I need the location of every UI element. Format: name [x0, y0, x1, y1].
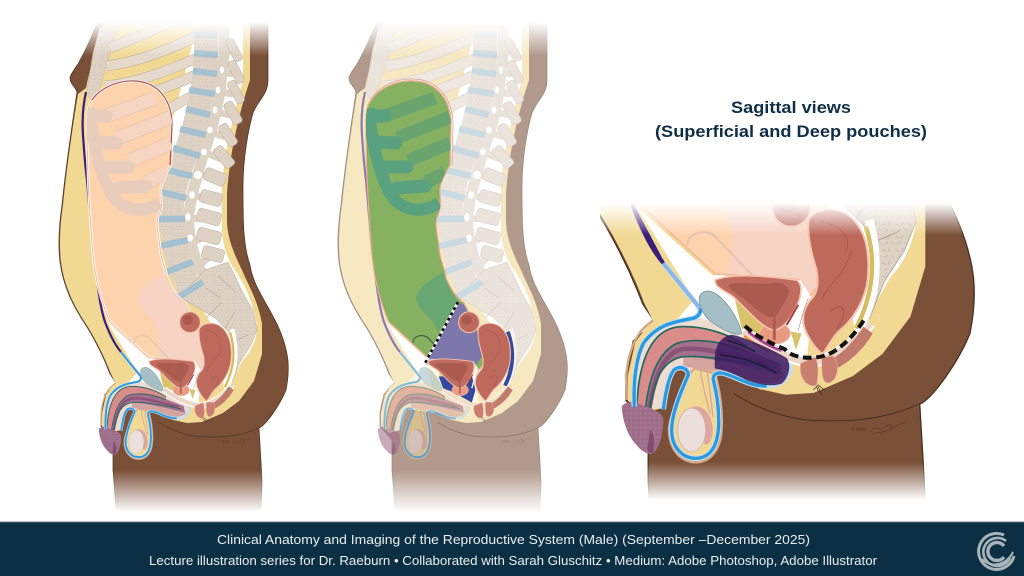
faded body, fat, spine and ribs	[338, 15, 567, 510]
figure: left sagittal view	[50, 14, 290, 512]
body silhouette, fat, spine and ribs	[59, 15, 288, 510]
heading: sagittal views: Sagittal views	[731, 98, 851, 117]
top fade gradient	[329, 22, 569, 56]
footer caption line 1: Clinical Anatomy and Imaging of the Reproductive System (Male) (September –December 2025)	[217, 532, 810, 547]
bladder, prostate, rectum and sigmoid	[149, 312, 234, 418]
enlarged genital and pelvic organs	[622, 188, 920, 462]
footer caption line 2: Lecture illustration series for Dr. Raeburn • Collaborated with Sarah Gluschitz • Medium: Adobe Photoshop, Adobe Illustrator	[149, 553, 878, 568]
top fade gradient	[600, 203, 963, 234]
bottom fade	[374, 470, 564, 512]
top fade	[329, 14, 569, 22]
figure: right enlarged pelvic view	[600, 204, 975, 498]
deep blue pelvic spaces and organs	[428, 312, 513, 418]
top fade	[600, 200, 950, 203]
enlarged pelvis anatomy	[600, 204, 975, 498]
figure: middle sagittal view with peritoneal cavity colored	[329, 14, 569, 512]
penis, scrotum and pubic bone	[99, 329, 259, 459]
icon: logo	[979, 533, 1014, 569]
top fade gradient	[50, 22, 290, 56]
dashed boundary	[424, 302, 458, 365]
heading: sagittal views: (Superficial and Deep pouches)	[655, 122, 927, 141]
faded penis, scrotum and pubic bone	[378, 329, 538, 459]
green peritoneal cavity	[366, 79, 483, 371]
heading: sagittal views	[655, 98, 927, 141]
bottom fade	[95, 470, 285, 512]
footer band	[0, 522, 1024, 576]
abdominal cavity	[87, 81, 204, 371]
bottom fade	[648, 464, 926, 500]
top fade	[50, 14, 290, 22]
